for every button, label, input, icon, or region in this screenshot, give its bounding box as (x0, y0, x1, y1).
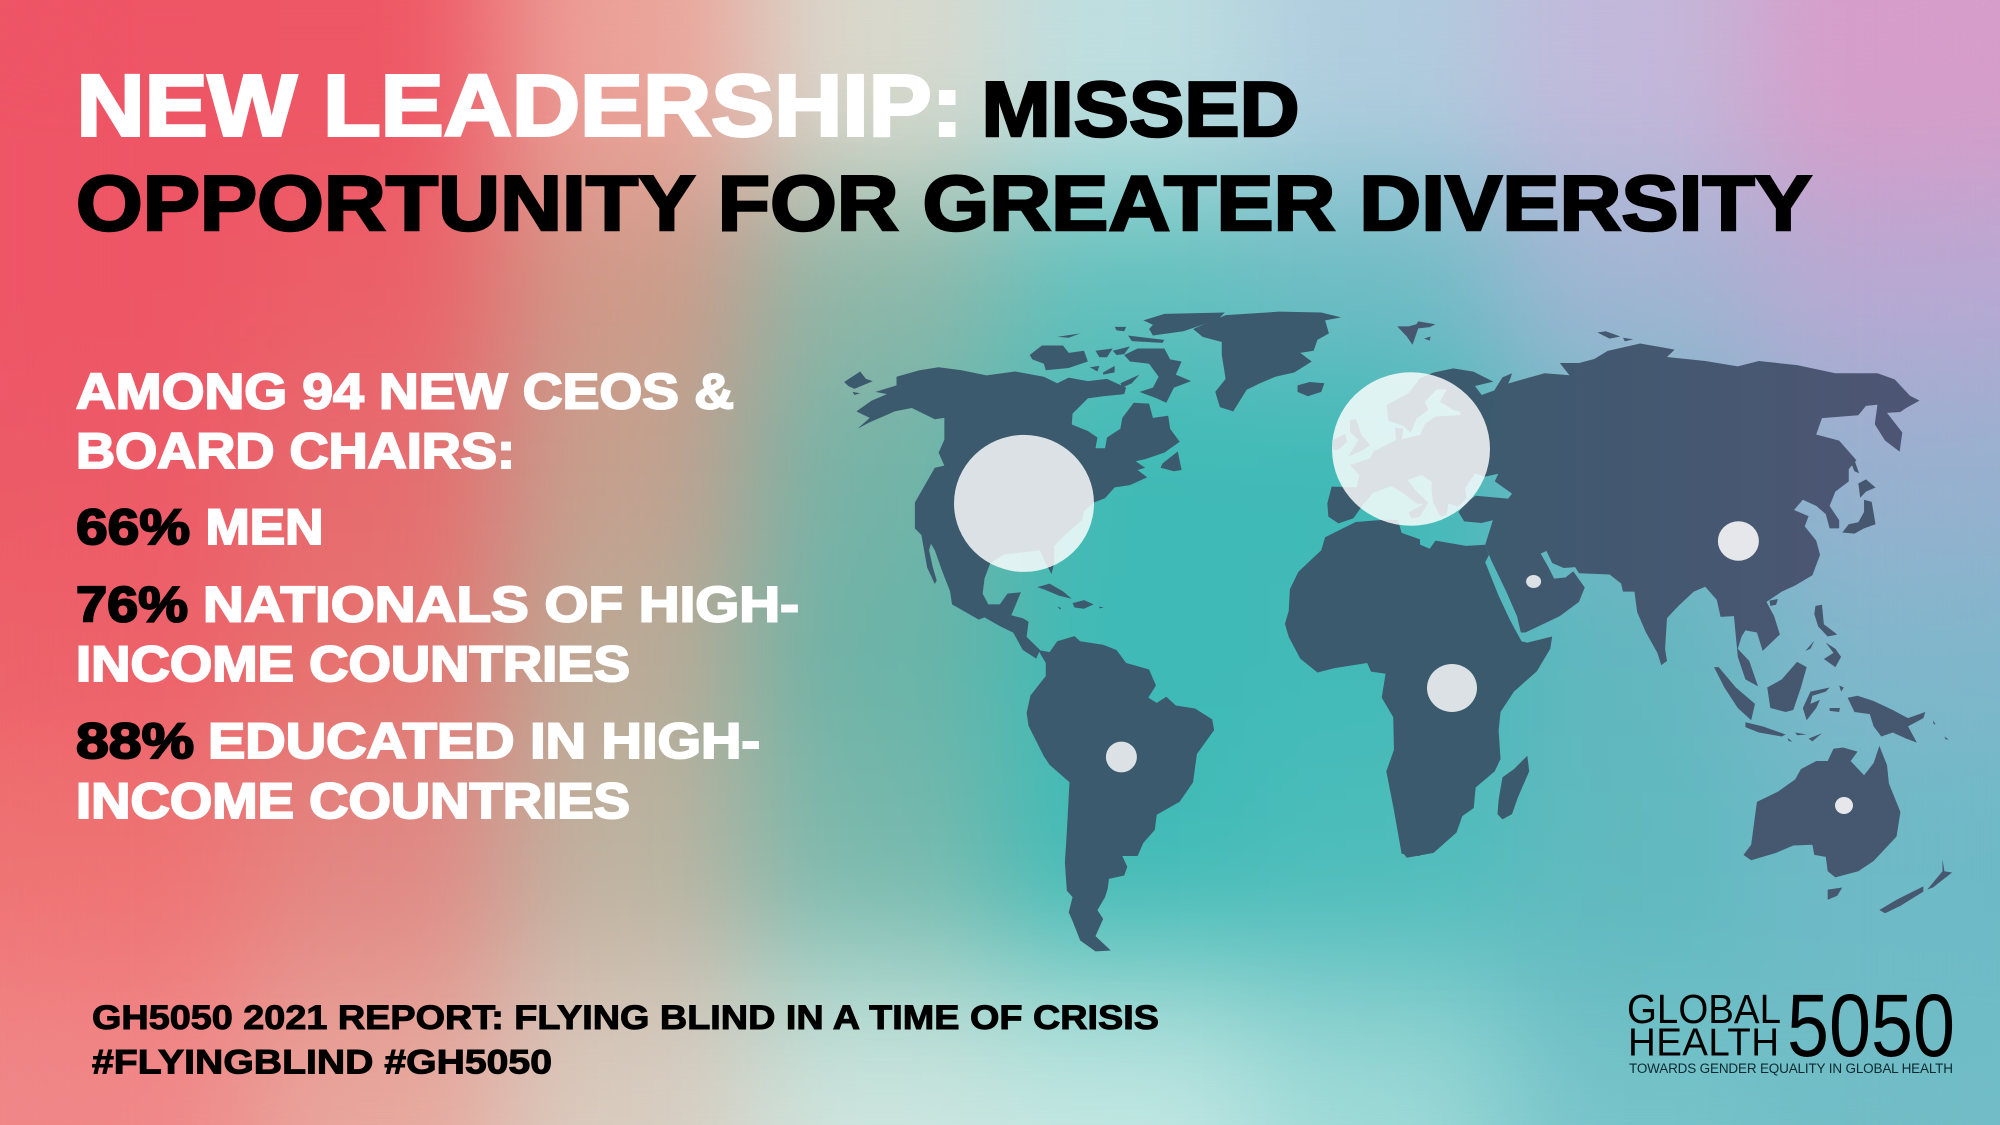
world map (844, 312, 1952, 951)
logo: global health 5050: GLOBAL (1627, 986, 1781, 1032)
title (76, 57, 1812, 247)
statistics text block (76, 363, 799, 829)
intro text (76, 363, 734, 479)
map: asian and oceanian islands (1397, 321, 1952, 913)
map: tasmania (1828, 888, 1842, 900)
title line 1: new leadership: NEW LEADERSHIP: (76, 57, 963, 154)
stat: 66% men: MEN (206, 499, 324, 555)
stat: 66% men (76, 499, 324, 555)
stat: 76% nationals of high-income countries: 76% (76, 576, 188, 632)
circle: africa (1427, 664, 1477, 712)
stat: 88% educated in high-income countries: INCOME COUNTRIES (76, 773, 630, 829)
stat: 88% educated in high-income countries: 88% (76, 713, 194, 769)
map: europe (1327, 368, 1500, 523)
circle: middle east (1526, 575, 1541, 588)
circle: australia (1835, 797, 1853, 814)
circle: europe (1332, 372, 1490, 526)
map: north america, greenland and arctic islands (844, 312, 1341, 659)
logo: global health 5050 (1627, 975, 1955, 1076)
map: africa (1285, 520, 1552, 858)
footer report reference (92, 999, 1159, 1082)
intro text: AMONG 94 NEW CEOS & (76, 363, 734, 419)
title line 2: OPPORTUNITY FOR GREATER DIVERSITY (76, 161, 1812, 247)
stat: 88% educated in high-income countries: EDUCATED IN HIGH- (208, 713, 760, 769)
map: south america (1027, 636, 1214, 951)
circle: asia (1718, 521, 1759, 561)
stat: 66% men: 66% (76, 499, 190, 555)
map: new zealand (1879, 859, 1952, 913)
logo: global health 5050: TOWARDS GENDER EQUALITY IN GLOBAL HEALTH (1629, 1061, 1953, 1076)
circle: north america (954, 435, 1094, 572)
stat: 76% nationals of high-income countries: NATIONALS OF HIGH- (203, 576, 799, 632)
map: australia (1744, 746, 1900, 877)
map: asia and middle east (1458, 343, 1920, 686)
stat: 76% nationals of high-income countries (76, 576, 799, 692)
title line 1: missed: MISSED (982, 67, 1300, 153)
stat: 76% nationals of high-income countries: INCOME COUNTRIES (76, 636, 630, 692)
location circles (954, 372, 1853, 814)
logo: global health 5050: 5050 (1787, 975, 1955, 1075)
footer report reference: GH5050 2021 REPORT: FLYING BLIND IN A TIME OF CRISIS (92, 999, 1159, 1037)
intro text: BOARD CHAIRS: (76, 423, 515, 479)
logo: global health 5050: HEALTH (1628, 1022, 1779, 1065)
footer report reference: #FLYINGBLIND #GH5050 (92, 1044, 552, 1082)
circle: south america (1106, 742, 1137, 772)
stat: 88% educated in high-income countries (76, 713, 760, 829)
